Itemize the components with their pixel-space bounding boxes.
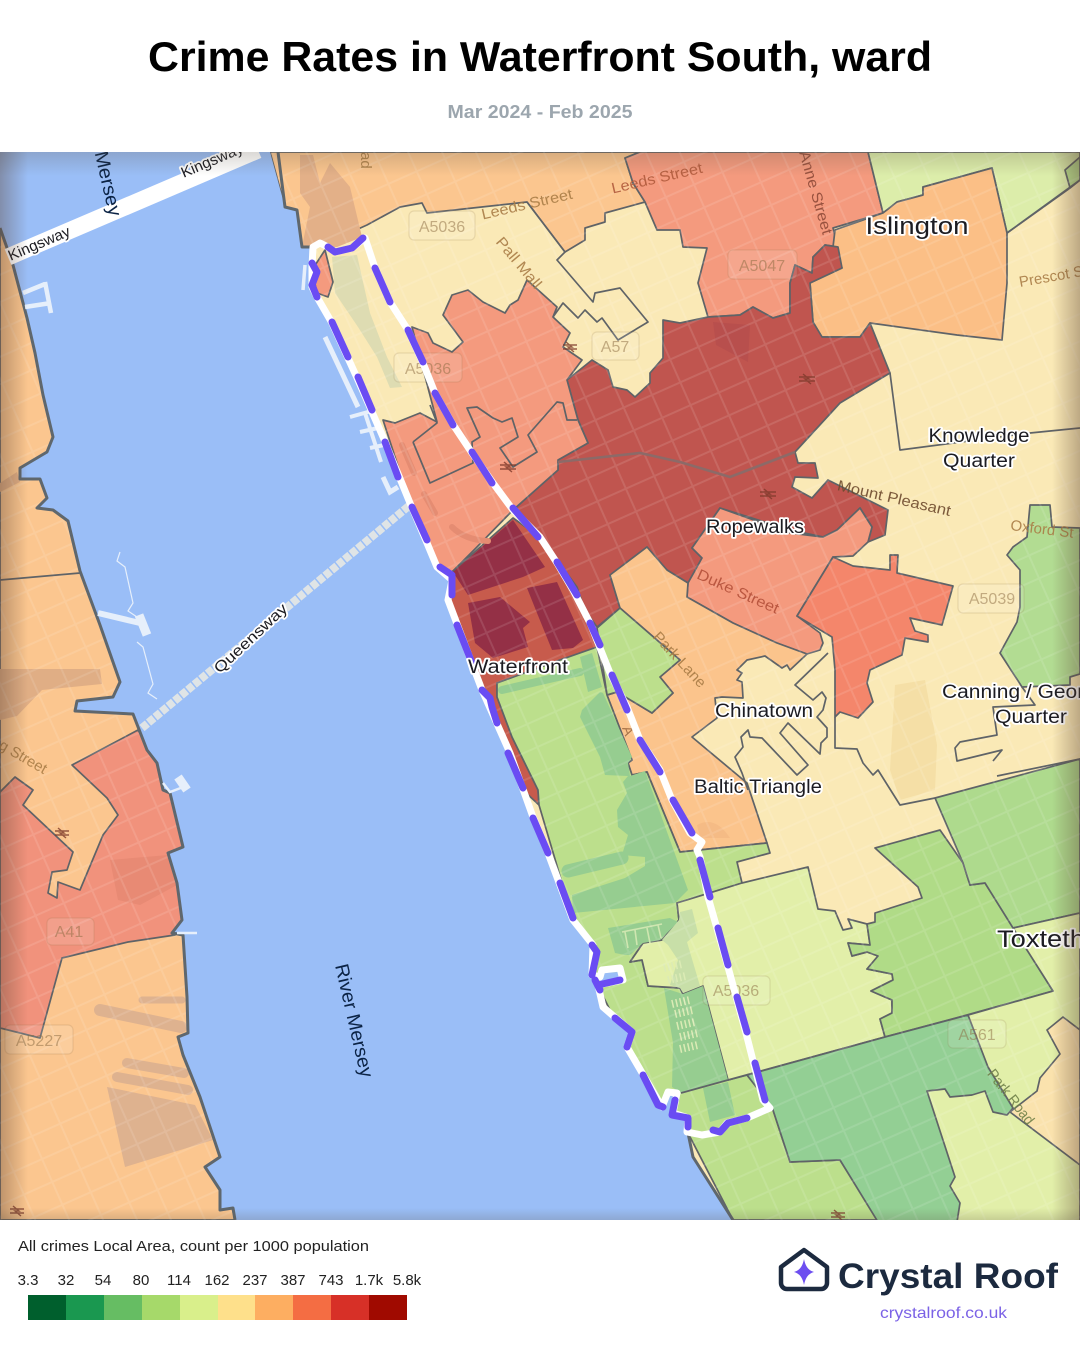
area: north salmon district xyxy=(625,152,883,318)
water and tunnel labels: Queensway xyxy=(211,600,292,677)
area: dark red city centre xyxy=(513,245,890,627)
legend scale labels: 743 xyxy=(318,1272,344,1289)
water: River Mersey xyxy=(0,152,733,1220)
road labels xyxy=(0,149,1080,1128)
area: Oxford Street green xyxy=(1000,505,1080,687)
road labels: Duke Street xyxy=(694,566,782,618)
choropleth areas xyxy=(0,152,1080,1222)
area: Birkenhead west bank xyxy=(0,152,235,1220)
area: Waterfront highest crime xyxy=(448,518,597,805)
green dock basins xyxy=(572,692,688,913)
road shields xyxy=(5,211,1024,1054)
area: north-east light green xyxy=(868,152,1080,233)
area: top right green xyxy=(1065,157,1080,188)
road shields: A5227 xyxy=(16,1033,62,1050)
area: Birkenhead red district xyxy=(0,730,183,1038)
legend scale labels: 32 xyxy=(58,1272,74,1289)
road labels: Pall Mall xyxy=(492,234,545,292)
road shields: A57 xyxy=(601,339,629,356)
legend scale labels: 237 xyxy=(242,1272,268,1289)
road shields: A5036 xyxy=(713,983,759,1000)
legend xyxy=(18,1238,422,1320)
subtitle: date range: Mar 2024 - Feb 2025 xyxy=(448,102,632,122)
road labels: Leeds Street xyxy=(480,186,575,223)
area: Canning red district xyxy=(797,555,953,718)
dock and building patches xyxy=(0,155,937,1167)
legend scale labels xyxy=(18,1272,422,1289)
hidden road label under ward line: A xyxy=(619,724,638,738)
title: Crime Rates in Waterfront South, ward xyxy=(148,33,932,80)
legend scale labels: 54 xyxy=(95,1272,111,1289)
area: Islington xyxy=(810,168,1007,340)
place labels: Islington xyxy=(866,213,968,240)
road labels: Park Lane xyxy=(649,629,709,691)
legend scale labels: 387 xyxy=(280,1272,306,1289)
road labels: Mount Pleasant xyxy=(836,477,953,520)
Queensway tunnel road xyxy=(142,505,410,728)
area: light green pocket xyxy=(597,608,680,713)
tunnels and piers xyxy=(8,150,410,933)
area: east mid green xyxy=(848,830,1053,1037)
water and tunnel labels: River Mersey xyxy=(330,962,377,1080)
area: Toxteth east pale xyxy=(927,913,1080,1222)
area: south mid green xyxy=(747,1015,1013,1222)
place labels: Waterfront xyxy=(468,657,569,678)
road labels: Park Road xyxy=(984,1066,1038,1128)
legend scale labels: 162 xyxy=(204,1272,230,1289)
area: Toxteth north green xyxy=(935,759,1080,928)
website: crystalroof.co.uk xyxy=(880,1305,1008,1322)
area: central salmon district xyxy=(383,280,588,572)
area: west of ward salmon sliver xyxy=(312,250,333,297)
area: yellow-green district xyxy=(630,867,893,1080)
area: Duke Street xyxy=(687,508,872,654)
area: Waterfront South green xyxy=(497,647,878,1220)
water and tunnel labels: Kingsway xyxy=(6,223,73,265)
place labels: Baltic Triangle xyxy=(694,777,822,798)
water and tunnel labels: Mersey xyxy=(90,149,125,219)
road labels: Oxford St xyxy=(1010,517,1075,542)
water and tunnel labels xyxy=(6,140,377,1080)
place labels: Toxteth xyxy=(997,926,1080,953)
area: north tan district xyxy=(270,152,645,252)
small inlet xyxy=(600,972,618,981)
place labels: Knowledge xyxy=(928,426,1030,447)
brand name: Crystal Roof xyxy=(838,1257,1058,1296)
area: south-east cream xyxy=(1010,1017,1080,1165)
road labels: Anne Street xyxy=(795,149,836,237)
legend scale labels: 3.3 xyxy=(18,1272,38,1289)
south-bank dock patches xyxy=(107,1087,213,1167)
street network overlay xyxy=(0,152,1080,1220)
road labels: ad xyxy=(357,152,374,169)
road shields: A561 xyxy=(958,1027,996,1044)
place labels xyxy=(468,213,1080,953)
place labels: Ropewalks xyxy=(706,517,804,538)
piers xyxy=(23,265,398,933)
road shields: A5036 xyxy=(405,361,451,378)
ward boundary: Waterfront South xyxy=(312,238,770,1135)
legend title: All crimes Local Area, count per 1000 population xyxy=(18,1238,369,1255)
road labels: Leeds Street xyxy=(610,160,705,197)
water and tunnel labels: Kingsway xyxy=(179,140,246,182)
road shields: A5047 xyxy=(739,258,785,275)
legend scale labels: 5.8k xyxy=(393,1272,422,1289)
icon: house with star xyxy=(781,1250,827,1289)
road shields: A41 xyxy=(55,924,83,941)
map edge vignette xyxy=(0,152,1080,1220)
road shields: A5039 xyxy=(969,591,1015,608)
road shields: A5036 xyxy=(419,219,465,236)
area: Park Lane tan district xyxy=(607,547,807,852)
white outline xyxy=(312,238,770,1135)
legend colour swatches xyxy=(28,1295,407,1320)
rail station icons xyxy=(10,342,845,1220)
legend scale labels: 114 xyxy=(167,1272,191,1289)
legend scale labels: 1.7k xyxy=(355,1272,384,1289)
coastline strokes xyxy=(0,152,733,1220)
place labels: Chinatown xyxy=(715,701,813,722)
Crystal Roof logo xyxy=(781,1250,1058,1322)
Kingsway tunnel road xyxy=(8,150,258,257)
place labels: Quarter xyxy=(995,707,1068,728)
internal boundary lines xyxy=(0,180,1080,1093)
place labels: Quarter xyxy=(943,451,1016,472)
purple dashed outline xyxy=(312,238,765,1132)
legend scale labels: 80 xyxy=(133,1272,149,1289)
